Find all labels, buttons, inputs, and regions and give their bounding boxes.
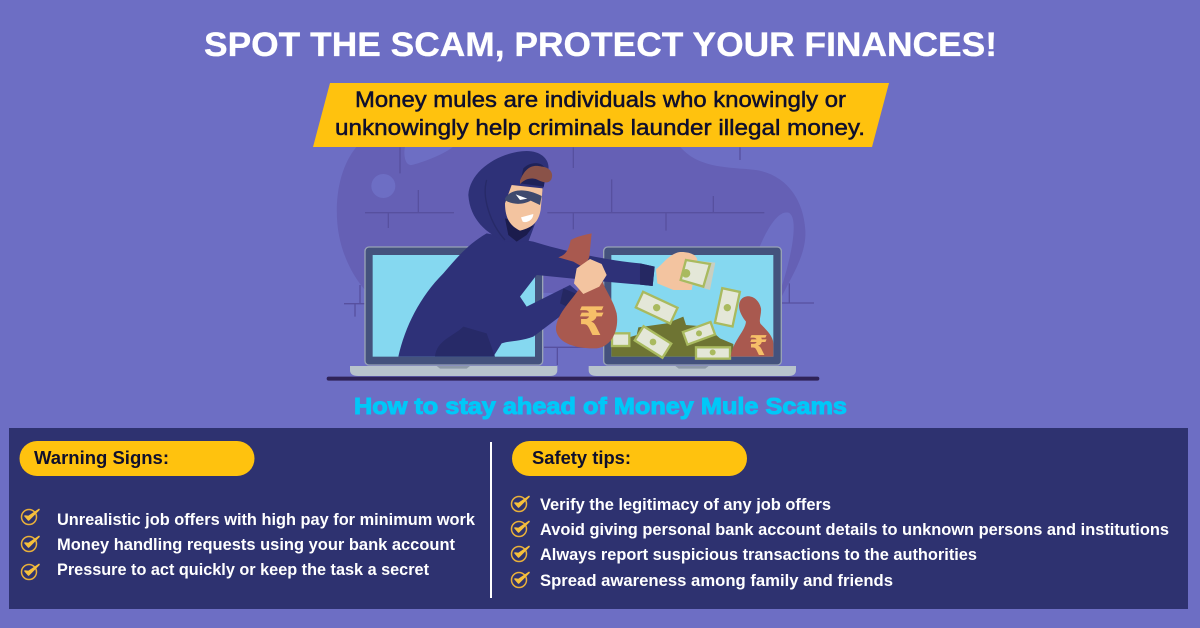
safety tips list: Spread awareness among family and friends — [540, 571, 893, 590]
gripping hand — [574, 259, 607, 294]
title: SPOT THE SCAM, PROTECT YOUR FINANCES! — [204, 26, 997, 64]
right laptop — [589, 247, 796, 376]
warning signs list: Money handling requests using your bank account — [57, 535, 455, 554]
definition banner — [313, 83, 889, 147]
ground line — [327, 377, 819, 381]
safety tips list: Always report suspicious transactions to the authorities — [540, 545, 977, 564]
blob highlights — [371, 147, 794, 287]
illustration: thief reaching between two laptops — [327, 147, 819, 381]
warning signs heading — [20, 441, 254, 476]
warning signs heading: Warning Signs: — [34, 448, 169, 468]
background blob — [337, 147, 805, 297]
safety tips list: Avoid giving personal bank account details to unknown persons and institutions — [540, 520, 1169, 539]
definition banner: Money mules are individuals who knowingly or — [355, 87, 846, 112]
left laptop — [350, 247, 557, 376]
warning signs list: Unrealistic job offers with high pay for minimum work — [57, 510, 476, 529]
warning signs list: Pressure to act quickly or keep the task a secret — [57, 560, 429, 579]
small money bag: ₹ — [749, 331, 768, 362]
brick wall lines — [344, 147, 814, 365]
small money bag — [731, 296, 773, 362]
subheading: How to stay ahead of Money Mule Scams — [354, 393, 847, 419]
warning signs list — [22, 510, 476, 580]
large money bag with rupee sign — [556, 233, 617, 348]
reaching hand holding cash — [656, 252, 715, 290]
thief face, mask and hair — [505, 166, 552, 231]
definition banner: unknowingly help criminals launder illegal money. — [335, 115, 865, 140]
safety tips list: Verify the legitimacy of any job offers — [540, 495, 831, 514]
divider — [490, 442, 492, 598]
panel: warning signs and safety tips — [9, 428, 1188, 609]
safety tips list — [512, 495, 1169, 590]
thief body and hoodie — [398, 151, 655, 357]
safety tips heading — [512, 441, 747, 476]
safety tips heading: Safety tips: — [532, 448, 631, 468]
large money bag with rupee sign: ₹ — [578, 299, 605, 345]
pile of money — [611, 288, 740, 359]
